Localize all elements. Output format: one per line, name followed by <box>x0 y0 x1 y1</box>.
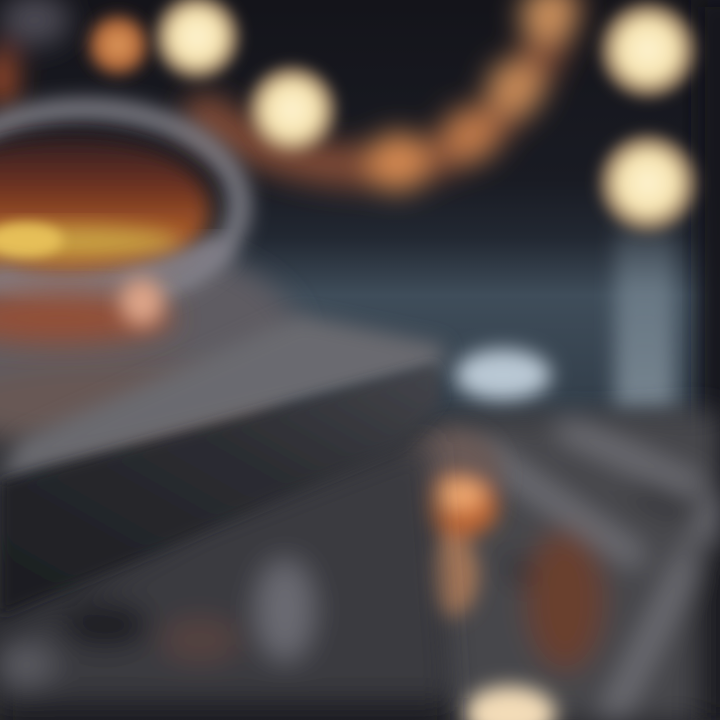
orange glass <box>407 430 503 617</box>
light column <box>615 225 675 410</box>
lower bowl rim <box>0 245 225 285</box>
yellow band <box>0 226 180 258</box>
white glow patch <box>455 349 551 401</box>
bokeh light: cream top <box>149 0 245 85</box>
right edge shadow <box>698 0 720 720</box>
bokeh light: orange top left <box>80 7 156 83</box>
copper highlight <box>120 278 164 326</box>
bottom glow <box>464 686 556 720</box>
dark slab <box>0 365 442 615</box>
glowing arc of lights <box>205 0 576 192</box>
lower right ornate surface <box>430 410 720 720</box>
bowl rim <box>0 109 240 301</box>
bowl with amber liquid <box>0 109 240 344</box>
top surface of slab <box>0 315 445 480</box>
bokeh light: cream right <box>593 128 703 238</box>
lower left ornate surface <box>0 440 450 720</box>
bokeh light: cream upper right <box>594 0 702 104</box>
bowl liquid <box>0 135 210 285</box>
bright yellow spot <box>0 223 63 257</box>
top-left ornament <box>0 0 70 110</box>
bowl lower tray <box>0 240 300 447</box>
bokeh light: cream centre <box>242 60 342 160</box>
copper base <box>0 292 175 344</box>
